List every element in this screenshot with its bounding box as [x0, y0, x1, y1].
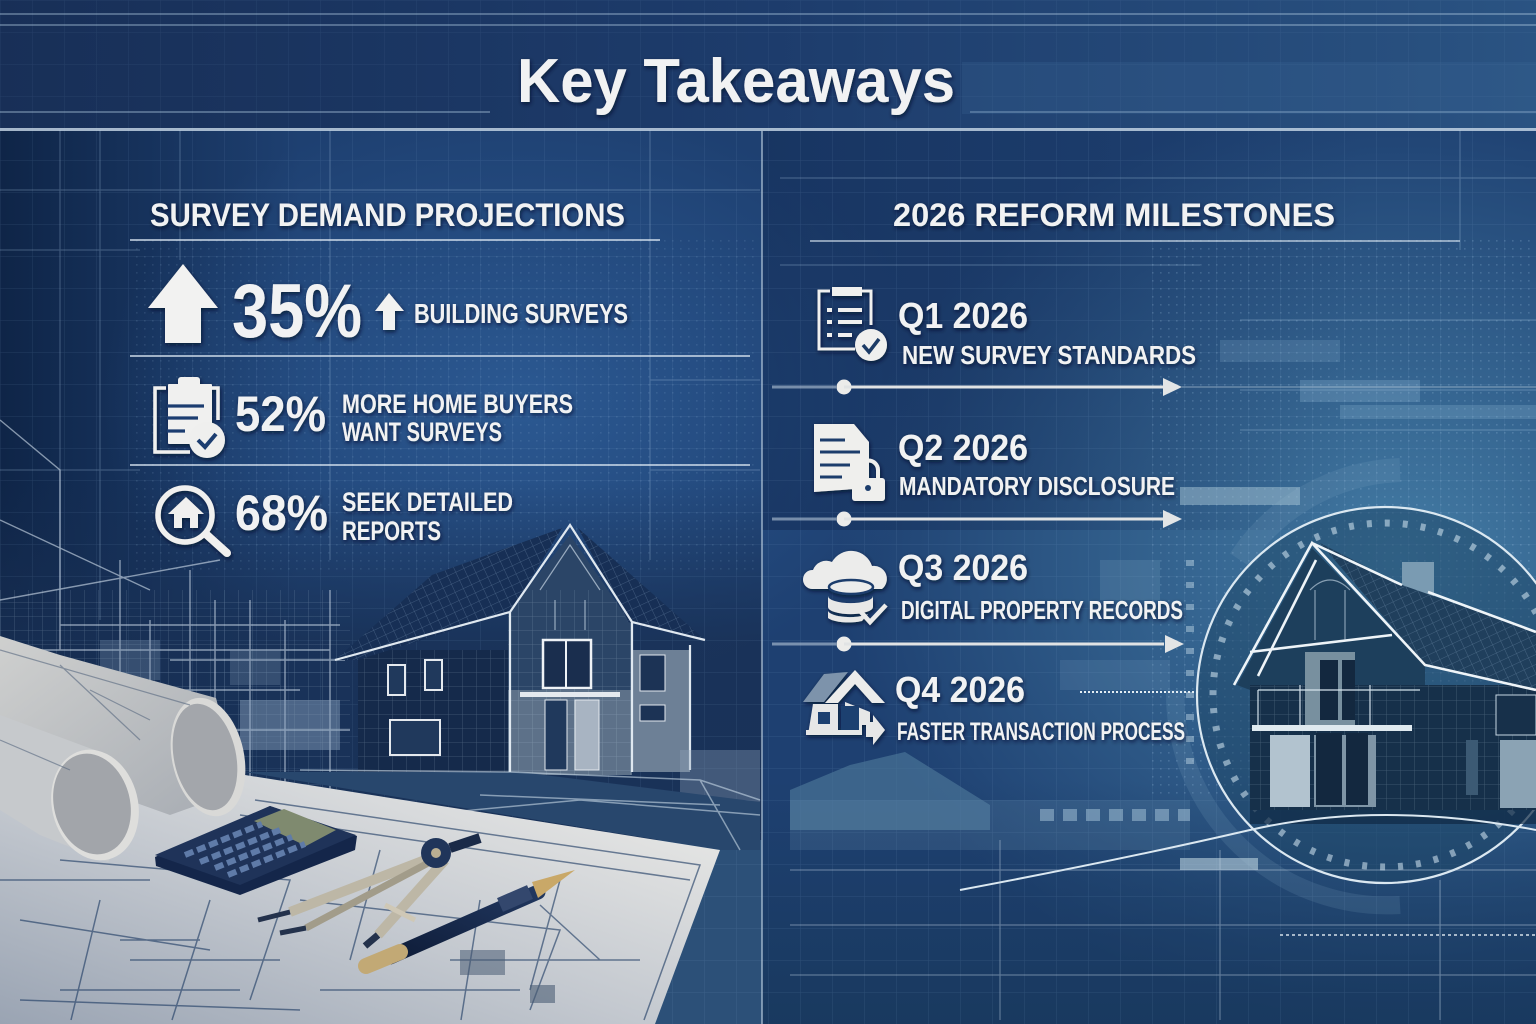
label: seek detailed reports: [342, 487, 513, 546]
blueprint rolls: [0, 636, 256, 870]
milestone text: digital property records: DIGITAL PROPERTY RECORDS: [901, 595, 1183, 625]
milestone text: new survey standards: NEW SURVEY STANDARDS: [902, 340, 1196, 370]
heading: survey demand projections: SURVEY DEMAND PROJECTIONS: [150, 197, 625, 233]
label: seek detailed reports: SEEK DETAILED: [342, 487, 513, 517]
milestone: Q3 2026: Q3 2026: [898, 547, 1028, 588]
header band: [0, 0, 1536, 131]
calculator: [155, 806, 357, 895]
label: seek detailed reports: REPORTS: [342, 516, 441, 546]
icon: cloud database: [803, 551, 887, 622]
icon: checklist clipboard: [819, 287, 887, 361]
panel: 2026 reform milestones: [772, 197, 1536, 746]
title: Key Takeaways: [517, 47, 955, 116]
left house illustration: [245, 525, 760, 850]
panel: survey demand projections: [130, 197, 750, 553]
timeline arrow 2: [772, 510, 1182, 528]
label: building surveys: BUILDING SURVEYS: [414, 298, 628, 329]
right house illustration: [1175, 470, 1536, 905]
heading: 2026 reform milestones: 2026 REFORM MILESTONES: [893, 197, 1335, 233]
label: more home buyers want surveys: MORE HOME BUYERS: [342, 389, 573, 419]
icon: clipboard with check: [155, 377, 225, 458]
left scene: blueprint wireframe street: [0, 420, 350, 800]
label: more home buyers want surveys: [342, 389, 573, 447]
icon: document with lock: [814, 424, 885, 501]
milestone: Q2 2026: Q2 2026: [898, 427, 1028, 468]
label: more home buyers want surveys: WANT SURVEYS: [342, 417, 502, 447]
right data texture: [790, 340, 1536, 1020]
timeline arrow 1: [772, 378, 1536, 396]
icon: house with arrow: [803, 670, 885, 745]
stat: 52%: 52%: [235, 386, 326, 442]
milestone: Q1 2026: Q1 2026: [898, 295, 1028, 336]
panel divider: [761, 131, 763, 1024]
milestone text: mandatory disclosure: MANDATORY DISCLOSURE: [899, 471, 1175, 501]
icon: small up arrow: [375, 293, 404, 330]
stat: 35%: 35%: [232, 269, 362, 354]
milestone: Q4 2026: Q4 2026: [895, 669, 1025, 710]
icon: magnifier with house: [158, 488, 227, 553]
icon: large up arrow: [148, 264, 218, 343]
blueprint sheet: [0, 775, 720, 1024]
timeline arrow 3: [772, 635, 1184, 653]
stat: 68%: 68%: [235, 485, 328, 541]
pen: [366, 870, 575, 966]
milestone text: faster transaction process: FASTER TRANSACTION PROCESS: [897, 718, 1185, 746]
compass: [258, 838, 480, 946]
